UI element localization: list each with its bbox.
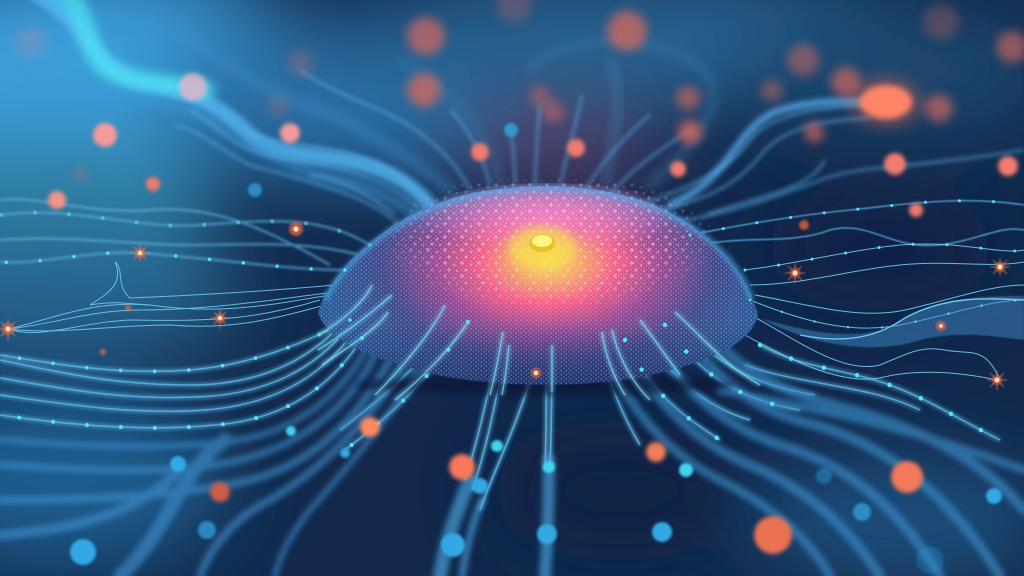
- orange foreground nodes: [210, 417, 923, 554]
- lower right blurred strands: [600, 320, 1024, 576]
- lower right thin filaments: [745, 244, 1024, 380]
- sparkling star nodes: [0, 220, 1010, 390]
- lower centre filaments: [465, 332, 552, 510]
- upper right filaments: [690, 201, 1024, 246]
- central dome cell: [318, 180, 758, 390]
- upper radiating filaments: [170, 70, 1024, 225]
- shadow beneath dome: [355, 375, 735, 395]
- left sharp filaments: [8, 262, 335, 333]
- blurred upper ribbons: [0, 0, 890, 215]
- lower right bundle sharp: [598, 320, 1000, 445]
- lower left blurred foreground strands: [0, 342, 430, 576]
- mesh ribbon highlight: [800, 299, 1024, 339]
- left soft filaments: [0, 199, 370, 270]
- filaments over dome lower edge: [318, 285, 760, 400]
- lower left bundle: [0, 320, 468, 450]
- bright orange hub upper right: [850, 78, 922, 126]
- dome bright nucleus: [508, 226, 576, 270]
- travelling signal dots on filaments: [0, 201, 1024, 450]
- blue bokeh nodes: [70, 123, 1002, 574]
- dome rim highlight: [325, 188, 752, 300]
- lower right mesh ribbon: [760, 296, 1024, 347]
- central foreground blurred strands: [440, 460, 549, 576]
- bright orange-pink small nodes upper: [48, 73, 1018, 217]
- dome pink speckles: [385, 180, 716, 308]
- dim orange bokeh nodes upper: [15, 0, 1024, 180]
